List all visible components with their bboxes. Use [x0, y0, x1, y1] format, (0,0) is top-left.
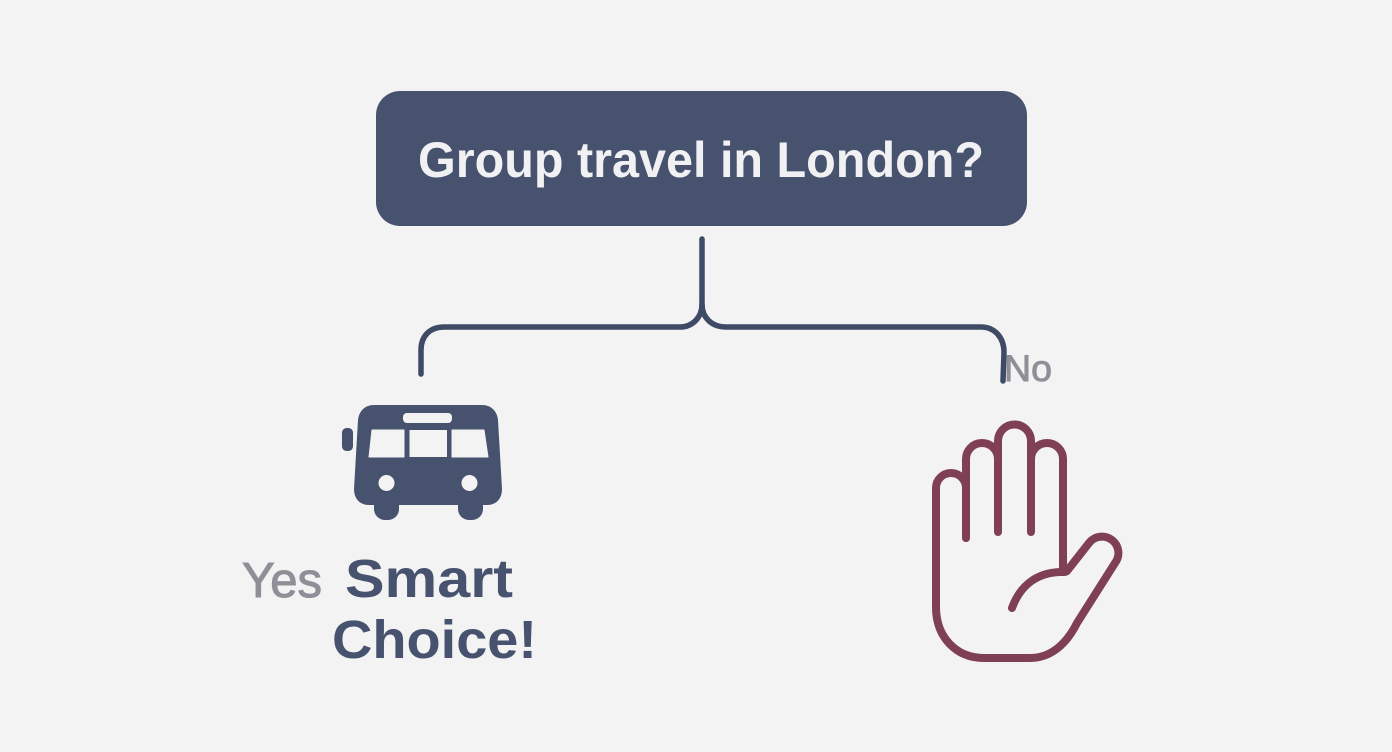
text: Smart Choice!: Choice!: [332, 610, 537, 670]
label: No: No: [1004, 348, 1052, 389]
decision connector: [421, 239, 1004, 381]
text: Smart Choice!: [332, 549, 537, 670]
question box: [376, 91, 1027, 226]
label: Yes: Yes: [242, 554, 322, 608]
icon: raised hand: [936, 425, 1118, 658]
title: Group travel in London?: [418, 132, 984, 188]
icon: bus: [342, 405, 502, 520]
text: Smart Choice!: Smart: [345, 549, 513, 609]
